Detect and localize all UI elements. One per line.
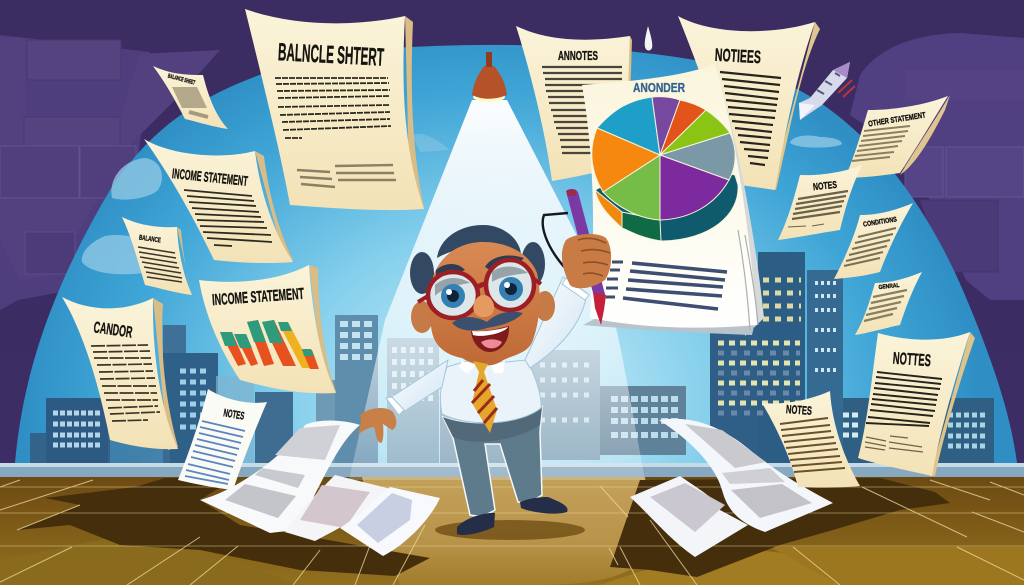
glasses bbox=[418, 260, 541, 318]
paper: small statement top right bbox=[845, 95, 950, 178]
paper: tiny document right: GENRAL bbox=[878, 283, 900, 291]
clouds bbox=[82, 134, 842, 274]
pie chart bbox=[592, 97, 738, 241]
paper: small notes right: NOTES bbox=[813, 180, 838, 193]
paper: annotes: ANNOTES bbox=[558, 48, 598, 63]
rocket bbox=[799, 62, 855, 120]
paper: nottes bbox=[858, 332, 975, 476]
paper: small document top left bbox=[153, 66, 228, 129]
paper: small document left: BALANCE bbox=[138, 234, 161, 245]
paper: notees: NOTIEES bbox=[714, 45, 761, 67]
paper: income statement with bar chart: INCOME STATEMENT bbox=[212, 286, 305, 309]
paper: small document top left: BALANCE SHEET bbox=[167, 74, 196, 87]
paper: small statement top right: OTHER STATEMENT bbox=[868, 111, 926, 128]
hair bbox=[410, 225, 545, 294]
paper: nottes: NOTTES bbox=[892, 349, 932, 370]
shoes bbox=[457, 497, 568, 535]
paper: small document left bbox=[122, 217, 192, 296]
big report sheet with pie chart bbox=[582, 64, 764, 336]
paper: small statement right bbox=[834, 203, 913, 279]
nose bbox=[473, 295, 494, 317]
mouth bbox=[471, 326, 509, 352]
sheet table block bbox=[650, 483, 725, 532]
pen and cord bbox=[543, 189, 606, 325]
paper: income statement: INCOME STATEMENT bbox=[171, 165, 249, 189]
paper: small notes bottom right bbox=[762, 391, 860, 488]
wooden floor bbox=[0, 477, 1024, 585]
city skyline bbox=[30, 252, 994, 463]
hanging lamp bbox=[472, 52, 507, 102]
collar bbox=[459, 361, 505, 374]
paper: small statement right: CONDITIONS bbox=[863, 216, 898, 229]
ears bbox=[411, 291, 555, 333]
droplet bbox=[645, 26, 652, 51]
paper: tiny document right bbox=[855, 272, 922, 335]
loose sheets on floor left bbox=[285, 475, 440, 556]
paper: candor: CANDOR bbox=[92, 319, 134, 342]
paper: candor bbox=[62, 297, 178, 450]
paper: balance sheet: BALNCLE SHTERT bbox=[277, 38, 385, 72]
baseboard ledge bbox=[0, 463, 1024, 477]
shirt bbox=[386, 277, 589, 423]
cartoon accountant bbox=[358, 189, 611, 540]
paper: annotes bbox=[516, 26, 632, 181]
eyes bbox=[441, 277, 523, 308]
paper: income statement bbox=[144, 139, 293, 263]
paper: balance sheet bbox=[245, 9, 424, 210]
loose sheet on floor right bbox=[630, 476, 748, 557]
curled sheet on floor left bbox=[200, 420, 360, 533]
face bbox=[430, 242, 540, 365]
paper: small notes right bbox=[778, 165, 862, 240]
spotlight beam bbox=[349, 100, 645, 480]
lowered hand bbox=[358, 408, 396, 443]
paper: notees bbox=[678, 16, 820, 190]
hand holding pen bbox=[562, 234, 611, 288]
sky dome bbox=[15, 45, 1017, 463]
eyebrows bbox=[436, 255, 524, 276]
trousers bbox=[443, 407, 542, 516]
curled sheet on floor right bbox=[659, 419, 833, 532]
floor shadows bbox=[17, 478, 950, 577]
paper: income statement with bar chart bbox=[199, 265, 336, 393]
floor shadow bbox=[435, 520, 585, 540]
floor plank lines bbox=[0, 480, 1024, 585]
big report sheet with pie chart: ANONDER bbox=[633, 80, 685, 95]
paper: blue notes bbox=[178, 389, 267, 490]
paper: small notes bottom right: NOTES bbox=[786, 402, 812, 418]
paper: blue notes: NOTES bbox=[222, 407, 245, 423]
bar chart bbox=[220, 320, 319, 369]
striped tie bbox=[472, 361, 497, 433]
moustache bbox=[452, 312, 523, 331]
